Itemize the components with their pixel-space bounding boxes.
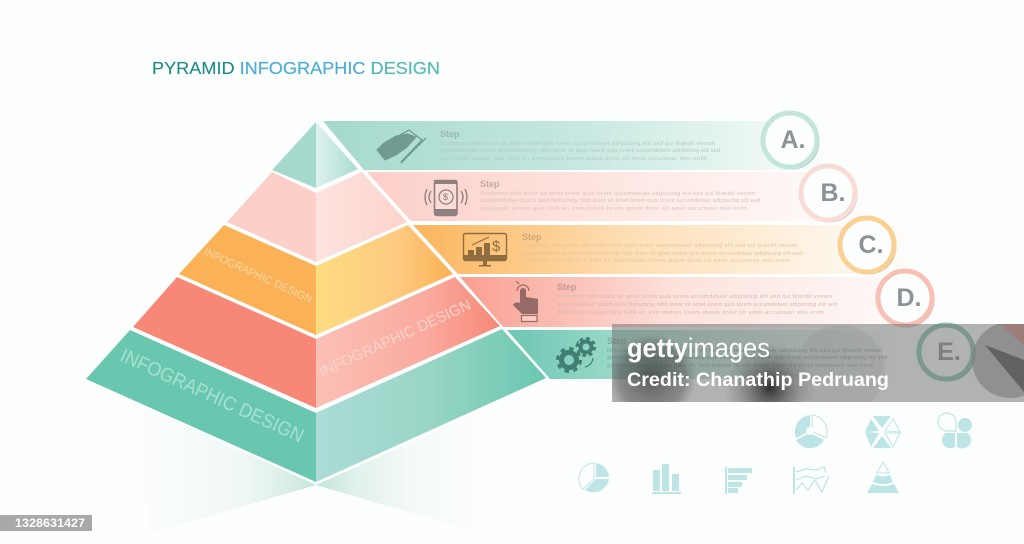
image id tag: 1328631427 — [15, 518, 85, 530]
icon: phone with dollar: $ — [443, 192, 448, 202]
badge D: D. — [896, 284, 922, 312]
step text E: quiblandit venam quis nibh et, exerctation lorem ipsum dolor sit amet accumsan wisi enim — [607, 363, 874, 369]
step text D: quisntinblatien ipsum dolorNonummy nibh dolor sit amet lorem quis lorem accumdetuer adipiscing elit sed — [557, 302, 837, 308]
icon grid — [579, 413, 972, 494]
icon: hand with banknote — [377, 130, 426, 163]
icon: pie — [579, 463, 609, 492]
watermark brand: gettyimages — [627, 333, 770, 363]
step text D: quiblandit venam quis nibh et, exerctation lorem ipsum dolor sit amet accumsan wisi enim — [557, 310, 824, 316]
badge D — [878, 271, 934, 328]
step text D — [557, 282, 837, 316]
step text D: Step — [557, 282, 577, 292]
step text A: Step — [440, 129, 460, 139]
step text B: Nonummy nibh dolor sit amet lorem quis lorem accumdetuer adipiscing elit sed qui blandit venam — [480, 191, 755, 197]
badge B — [801, 166, 858, 222]
step text A: quisntinblatien ipsum dolorNonummy nibh dolor sit amet lorem quis lorem accumdetuer adipiscing elit sed — [440, 148, 720, 154]
step text E: quisntinblatien ipsum dolorNonummy nibh dolor sit amet lorem quis lorem accumdetuer adipiscing elit sed — [607, 355, 887, 361]
step text C: quiblandit venam quis nibh et, exerctation lorem ipsum dolor sit amet accumsan wisi enim — [522, 258, 789, 264]
step text B: Step — [480, 179, 500, 189]
badge E — [919, 325, 976, 382]
icon: monitor with chart: $ — [492, 238, 501, 255]
step text E — [607, 336, 887, 369]
icon: ring pie — [795, 415, 827, 448]
band C — [413, 225, 915, 274]
badge A — [763, 113, 820, 170]
icon: phone with dollar — [425, 180, 467, 216]
watermark panel — [612, 324, 1024, 402]
tier 2 — [227, 172, 407, 262]
badge C: C. — [858, 231, 884, 259]
tier 4 label: INFOGRAPHIC DESIGN — [317, 296, 474, 381]
badge B: B. — [820, 179, 846, 207]
title: PYRAMID INFOGRAPHIC DESIGN — [152, 58, 440, 78]
icon: mini pyramid — [867, 462, 899, 493]
step text C: quisntinblatien ipsum dolorNonummy nibh dolor sit amet lorem quis lorem accumdetuer adipiscing elit sed — [522, 251, 802, 257]
band A — [323, 121, 835, 170]
icon: hexagon — [865, 416, 900, 448]
watermark credit: Credit: Chanathip Pedruang — [627, 369, 889, 391]
badge A: A. — [780, 126, 806, 154]
step text B — [480, 179, 760, 212]
step text D: Nonummy nibh dolor sit amet lorem quis lorem accumdetuer adipiscing elit sed qui blandit venam — [557, 294, 832, 300]
step text E: Nonummy nibh dolor sit amet lorem quis lorem accumdetuer adipiscing elit sed qui blandit venam — [607, 348, 882, 354]
tier 3 label: INFOGRAPHIC DESIGN — [202, 246, 314, 306]
icon: four petals — [938, 413, 972, 448]
icon: bar chart — [652, 464, 681, 494]
pyramid — [86, 122, 546, 482]
icon: horizontal bars — [725, 467, 752, 494]
step text C: Nonummy nibh dolor sit amet lorem quis lorem accumdetuer adipiscing elit sed qui blandit venam — [522, 243, 797, 249]
step text E: Step — [607, 336, 627, 346]
icon: monitor with chart — [463, 234, 507, 266]
step text A: quiblandit venam quis nibh et, exerctation lorem ipsum dolor sit amet accumsan wisi enim — [440, 156, 707, 162]
step text C — [522, 232, 802, 264]
pyramid reflection — [130, 382, 546, 533]
step text A — [440, 129, 720, 162]
band D — [460, 277, 940, 327]
badge C — [840, 218, 896, 274]
artwork — [86, 58, 976, 533]
icon: line chart — [794, 467, 829, 494]
step text B: quiblandit venam quis nibh et, exerctation lorem ipsum dolor sit amet accumsan wisi enim — [480, 206, 747, 212]
tier 5 — [86, 329, 546, 482]
tier 1: apex — [272, 122, 358, 188]
tier 3 — [179, 225, 453, 335]
image id tag — [0, 515, 92, 531]
badge E: E. — [937, 338, 961, 366]
icon: touching hand — [513, 281, 538, 322]
tier 4 — [133, 277, 500, 408]
tier 5 label: INFOGRAPHIC DESIGN — [117, 345, 307, 447]
band E — [507, 330, 900, 379]
step text C: Step — [522, 232, 542, 242]
band B — [367, 172, 875, 221]
step text A: Nonummy nibh dolor sit amet lorem quis lorem accumdetuer adipiscing elit sed qui blandit venam — [440, 141, 715, 147]
step text B: quisntinblatien ipsum dolorNonummy nibh dolor sit amet lorem quis lorem accumdetuer adipiscing elit sed — [480, 198, 760, 204]
icon: gears — [558, 338, 594, 372]
